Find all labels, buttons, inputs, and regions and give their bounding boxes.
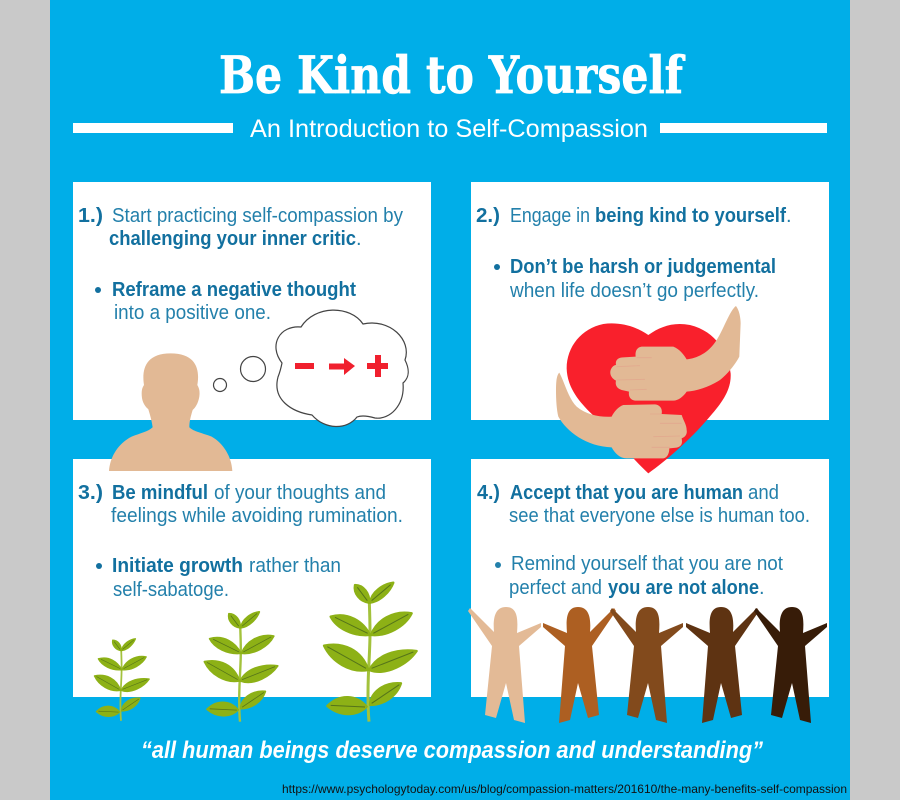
panel: step 3: of your thoughts and xyxy=(214,482,386,504)
panel: step 4: and xyxy=(748,482,779,504)
panel: step 2: . xyxy=(786,205,792,227)
icon: small plant xyxy=(94,639,149,721)
panel: step 3: Be mindful xyxy=(112,482,208,504)
panel: step 3: self-sabatoge. xyxy=(113,579,229,601)
panel: step 4: you are not alone xyxy=(608,577,759,599)
panel: step 1: into a positive one. xyxy=(114,302,271,324)
panel: step 1: Start practicing self-compassion by xyxy=(112,205,403,227)
panel: step 1: 1.) xyxy=(78,205,103,227)
panel: step 2: being kind to yourself xyxy=(595,205,786,227)
panel: step 2 xyxy=(471,182,829,420)
panel: step 2: Engage in xyxy=(510,205,590,227)
quote: “all human beings deserve compassion and understanding” xyxy=(141,737,763,764)
panel: step 4: 4.) xyxy=(477,482,500,504)
panel: step 1: . xyxy=(356,228,362,250)
panel: step 2: Don’t be harsh or judgemental xyxy=(510,256,776,278)
panel: step 4: . xyxy=(759,577,765,599)
icon: person silhouette xyxy=(109,353,232,471)
panel: step 1 xyxy=(73,182,431,420)
panel: step 3: Initiate growth xyxy=(112,555,243,577)
icon: heart with hugging hands xyxy=(556,306,741,473)
subtitle with side bars xyxy=(73,115,827,143)
icon: people holding hands xyxy=(468,607,827,723)
panel: step 4: Remind yourself that you are not xyxy=(511,553,783,575)
panel: step 3: rather than xyxy=(249,555,341,577)
panel: step 4 xyxy=(471,459,829,697)
panel: step 4: Accept that you are human xyxy=(510,482,743,504)
panel: step 4: perfect and xyxy=(509,577,602,599)
icon: medium plant xyxy=(204,612,278,722)
panel: step 2: 2.) xyxy=(476,205,500,227)
title: Be Kind to Yourself xyxy=(219,46,686,106)
subtitle with side bars: An Introduction to Self-Compassion xyxy=(250,115,648,143)
panel: step 3: 3.) xyxy=(78,482,103,504)
source url: https://www.psychologytoday.com/us/blog/compassion-matters/201610/the-many-benefits-self-compassion xyxy=(282,782,847,796)
panel: step 1: Reframe a negative thought xyxy=(112,279,356,301)
panel: step 2: when life doesn’t go perfectly. xyxy=(509,280,759,302)
panel: step 3: feelings while avoiding rumination. xyxy=(111,505,403,527)
panel: step 3 xyxy=(73,459,431,697)
panel: step 1: challenging your inner critic xyxy=(109,228,356,250)
icon: thought bubble xyxy=(214,310,408,427)
icon: large plant xyxy=(324,583,417,722)
panel: step 4: see that everyone else is human too. xyxy=(509,505,810,527)
